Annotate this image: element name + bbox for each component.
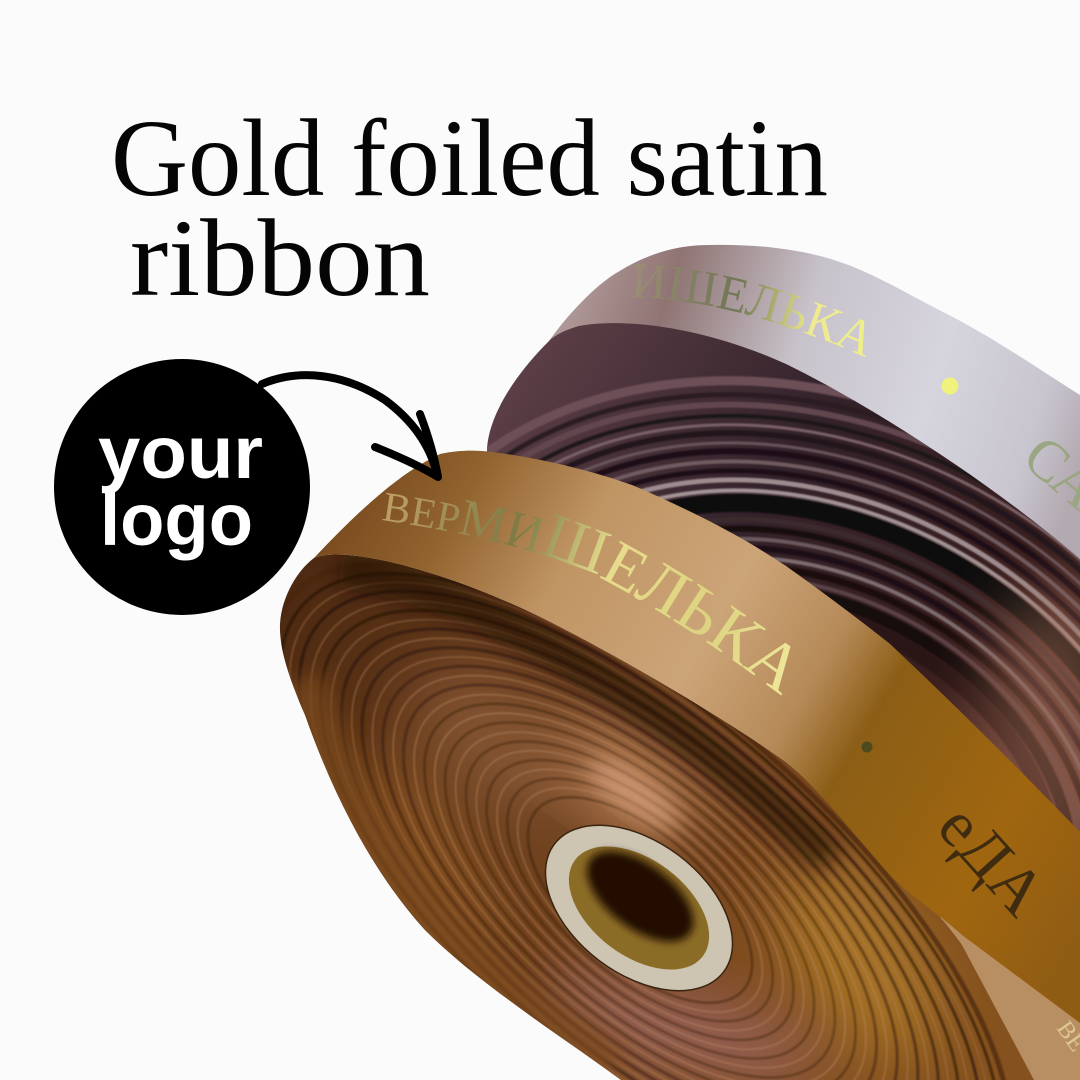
logo text: [98, 411, 263, 561]
logo text: your: [98, 411, 263, 494]
rear band foil dot: [942, 378, 958, 394]
core hole: [546, 822, 732, 994]
rear roll satin band: [549, 245, 1080, 559]
front band dark foil letters: еДА: [924, 790, 1060, 930]
logo text: logo: [100, 478, 253, 561]
dense dark rim under the band: [340, 570, 830, 860]
front band dot: [862, 742, 872, 752]
rear roll face: [487, 323, 1080, 832]
logo badge: [54, 359, 310, 615]
front roll face: [280, 554, 1034, 1080]
satin colour shading: [335, 633, 976, 1080]
front band foil text: ВЕРМИШЕЛЬКА: [382, 492, 790, 696]
title: ribbon: [130, 197, 430, 319]
title: [111, 97, 828, 319]
title: Gold foiled satin: [111, 97, 828, 219]
smooth lower-left rim: [300, 680, 610, 1070]
tan ribbon tail: [940, 915, 1080, 1080]
rear band foil text: ИШЕЛЬКА: [632, 264, 866, 358]
front ribbon roll: [280, 450, 1080, 1080]
winding rings: [280, 561, 1006, 1080]
peach highlight near core: [582, 755, 688, 839]
rear ribbon roll: [487, 244, 1080, 832]
front roll satin band: [314, 451, 1080, 1023]
cardboard core: [515, 791, 763, 1025]
arrow from logo to ribbon: [262, 375, 438, 477]
